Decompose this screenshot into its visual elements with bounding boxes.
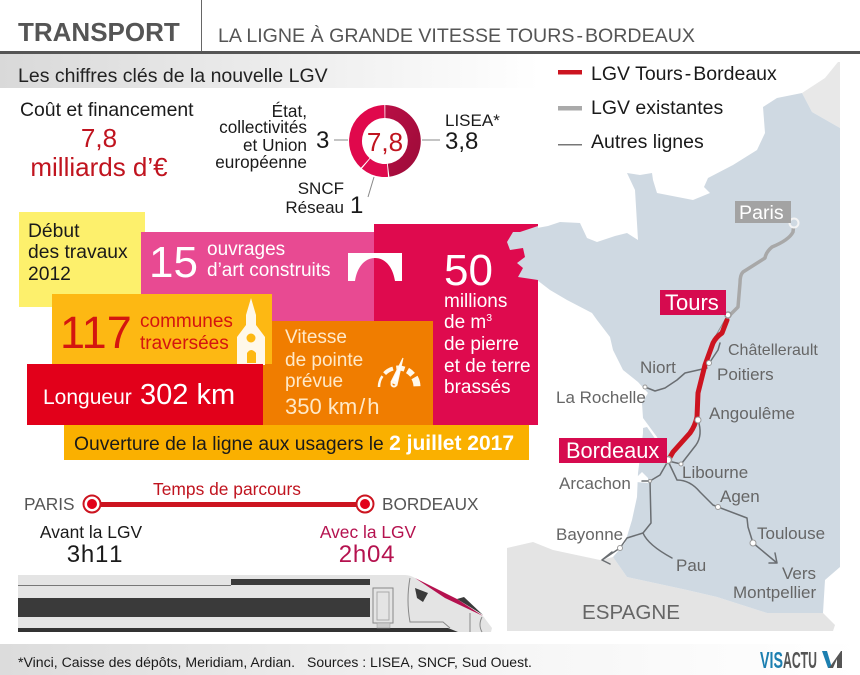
cost text [20, 99, 194, 182]
panel: engineering structures: ouvrages [207, 239, 285, 260]
legend: Tours-Bordeaux: LGV Tours-Bordeaux [591, 63, 777, 85]
map: Spain [507, 542, 835, 631]
legend: existing: LGV existantes [591, 97, 723, 119]
city label: Paris: Paris [739, 202, 784, 224]
panel: earth moved [374, 224, 538, 425]
footer: *Vinci, Caisse des dépôts, Meridiam, Ardian. [18, 654, 295, 670]
with LGV: Avec la LGV [320, 522, 417, 542]
route line [92, 502, 365, 507]
with LGV: 2h04 [339, 541, 395, 568]
footer [0, 644, 860, 675]
panel: opening date: Ouverture de la ligne aux usagers le 2 juillet 2017 [74, 432, 514, 455]
panel: communes: communes [140, 311, 233, 332]
label: État: État, [272, 101, 307, 121]
city labels: Niort [640, 358, 676, 377]
donut chart [215, 101, 500, 219]
panel: communes: 117 [60, 307, 132, 358]
before LGV: 3h11 [67, 541, 123, 568]
map: France [507, 93, 840, 613]
legend [558, 63, 777, 153]
before LGV: Avant la LGV [40, 522, 142, 542]
map [507, 62, 840, 631]
city labels: Montpellier [733, 583, 816, 602]
panel: earth moved: 3 [486, 312, 492, 324]
icon: church [237, 298, 265, 365]
panel: earth moved: millions [444, 291, 507, 312]
other lines [602, 318, 777, 564]
city label: Tours: Tours [665, 290, 719, 315]
cost text: Coût et financement [20, 99, 194, 121]
label: État: et Union [243, 135, 307, 155]
section heading: Les chiffres clés de la nouvelle LGV [18, 65, 328, 87]
panel: earth moved: 50 [444, 246, 493, 295]
logo [760, 647, 842, 673]
label: SNCF: SNCF [298, 179, 344, 198]
panel: top speed: Vitesse [285, 327, 347, 348]
footer: Sources : LISEA, SNCF, Sud Ouest. [307, 654, 532, 670]
value: LISEA: 3,8 [445, 128, 478, 155]
logo: ACTU [783, 647, 817, 673]
map: Arcachon basin [636, 472, 648, 483]
map: Belgium [802, 62, 840, 128]
city labels: Libourne [682, 463, 748, 482]
segment: État [349, 105, 385, 168]
station markers [618, 218, 798, 550]
station: Bordeaux [356, 496, 374, 512]
segment: LISEA [385, 105, 421, 177]
label: État: collectivités [219, 117, 307, 137]
legend: other: Autres lignes [591, 131, 704, 153]
rail network [602, 218, 798, 564]
panel: top speed [263, 321, 433, 425]
label: LISEA: LISEA* [445, 111, 500, 130]
panel: earth moved: et de terre [444, 356, 531, 377]
city labels: Arcachon [559, 474, 631, 493]
travel time [24, 479, 479, 568]
subtitle: LA LIGNE À GRANDE VITESSE TOURS-BORDEAUX [218, 24, 695, 47]
city labels: Bayonne [556, 525, 623, 544]
route title: Temps de parcours [153, 479, 301, 499]
city labels: Vers [782, 564, 816, 583]
label: Paris: PARIS [24, 494, 75, 514]
panel: top speed: 350 km/h [285, 394, 380, 419]
panel: earth moved: de m [444, 312, 492, 333]
section heading [0, 54, 540, 88]
panel: opening date [64, 425, 529, 460]
segment: SNCF Réseau [362, 159, 388, 177]
with LGV [320, 522, 417, 568]
panel: engineering structures: 15 [149, 238, 198, 287]
city labels [556, 342, 825, 602]
label: Espagne: ESPAGNE [582, 601, 680, 624]
label: Bordeaux: BORDEAUX [382, 494, 479, 514]
panel: top speed: de pointe [285, 350, 363, 371]
map: Brittany over panel [507, 226, 538, 280]
cost text: milliards d’€ [30, 152, 168, 182]
city labels: Agen [720, 487, 760, 506]
panel: length [27, 364, 263, 425]
panel: works start: 2012 [28, 264, 71, 285]
label: État: européenne [215, 152, 307, 172]
train illustration [18, 575, 492, 632]
title: TRANSPORT [18, 17, 180, 47]
panel: length: Longueur [43, 386, 132, 409]
icon: bridge [348, 253, 402, 281]
panel: length: 302 km [140, 379, 235, 411]
city labels: Toulouse [757, 524, 825, 543]
city label: Bordeaux: Bordeaux [566, 438, 659, 463]
panel: communes [52, 294, 272, 365]
before LGV [40, 522, 142, 568]
panel: earth moved: brassés [444, 377, 511, 398]
panel: earth moved: de pierre [444, 334, 519, 355]
city labels: La Rochelle [556, 388, 646, 407]
panel: top speed: prévue [285, 371, 343, 392]
city labels: Pau [676, 556, 706, 575]
panel: engineering structures [141, 232, 374, 322]
panel: works start [19, 212, 145, 307]
icon: speedometer [379, 358, 417, 387]
panel: works start: Début [28, 221, 80, 242]
label: SNCF: Réseau [285, 198, 344, 217]
donut value: 7,8 [367, 127, 403, 157]
station: Paris [84, 496, 100, 512]
logo: VIS [760, 647, 783, 673]
Tours-Bordeaux LGV [669, 320, 727, 459]
header [0, 0, 860, 54]
existing LGV [730, 223, 794, 315]
value: État: 3 [316, 127, 329, 154]
city labels: Châtellerault [728, 342, 818, 359]
cost text: 7,8 [81, 123, 117, 153]
city labels: Angoulême [709, 404, 795, 423]
panel: engineering structures: d’art construits [207, 260, 331, 281]
value: SNCF: 1 [350, 192, 363, 219]
panel: works start: des travaux [28, 242, 128, 263]
city labels: Poitiers [717, 365, 774, 384]
panel: communes: traversées [140, 333, 229, 354]
